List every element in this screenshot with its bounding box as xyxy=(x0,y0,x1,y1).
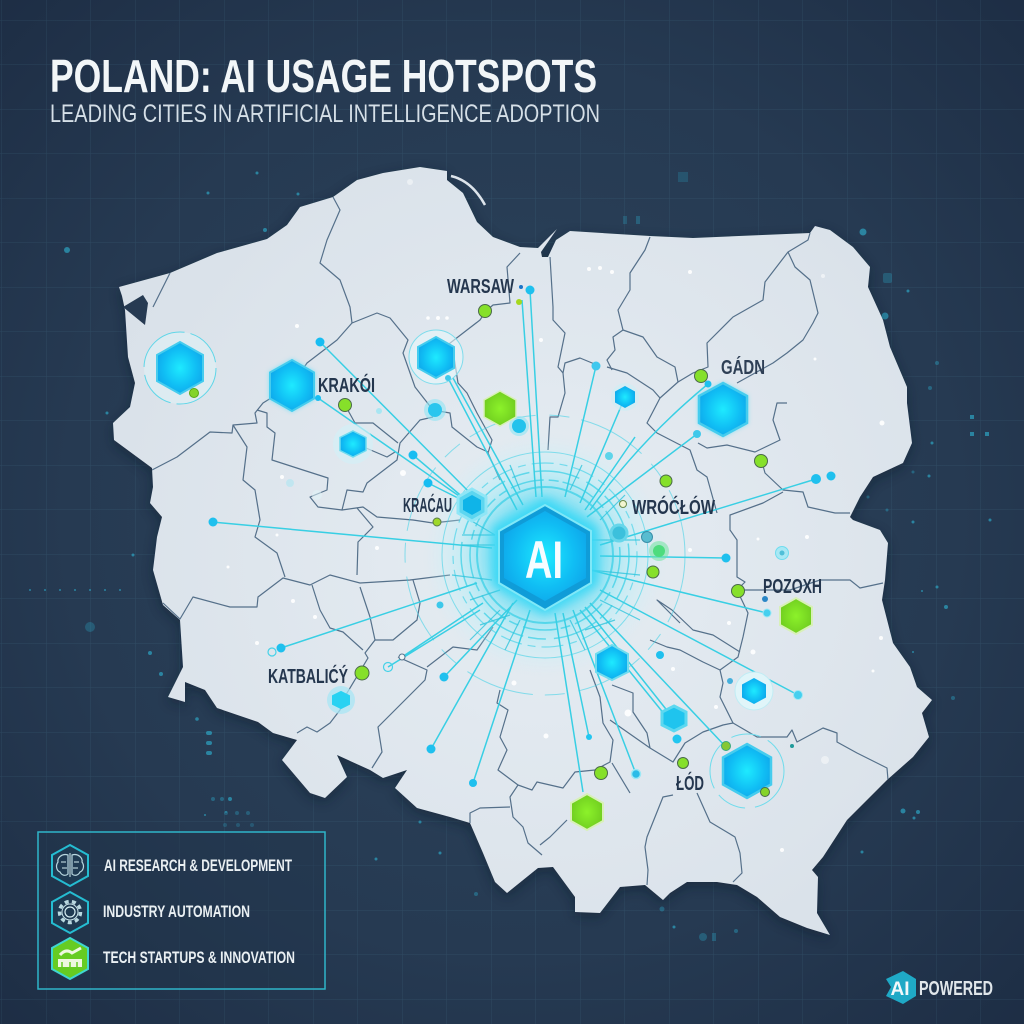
label: Warsaw: WARSAW xyxy=(447,276,514,298)
label: Katbalicy xyxy=(268,664,369,714)
legend item: industry automation xyxy=(52,892,250,933)
map of Poland xyxy=(113,167,932,939)
city node: western hotspot xyxy=(144,332,216,404)
green startup node: upper centre xyxy=(484,391,516,426)
outer end-point nodes xyxy=(208,518,477,787)
label: Wrocław xyxy=(611,495,788,578)
lagoon notch west xyxy=(123,295,148,325)
hex nodes: lower-right cluster xyxy=(586,645,802,780)
city node: lower-right hotspot xyxy=(710,734,794,808)
legend item: industry automation: INDUSTRY AUTOMATION xyxy=(103,903,250,921)
central AI hexagon xyxy=(492,497,598,615)
label: Kracau: KRAĆAU xyxy=(403,493,452,517)
legend item: tech startups: TECH STARTUPS & INNOVATION xyxy=(103,949,295,967)
label: Warsaw xyxy=(447,276,534,318)
hex nodes: upper-centre cluster xyxy=(333,330,701,488)
legend item: tech startups xyxy=(52,938,295,979)
network lines from the central AI hub xyxy=(212,290,816,792)
badge: AI powered: AI xyxy=(890,979,910,1000)
label: Łódź: ŁÓD xyxy=(676,771,704,795)
legend item: AI research xyxy=(52,845,292,886)
label: Krakói: KRAKÓI xyxy=(318,373,375,397)
badge: AI powered: POWERED xyxy=(919,978,993,1000)
legend item: AI research: AI RESEARCH & DEVELOPMENT xyxy=(104,857,292,875)
subtitle: LEADING CITIES IN ARTIFICIAL INTELLIGENCE ADOPTION xyxy=(50,100,600,128)
city node: Krakói hotspot xyxy=(269,338,382,414)
label: Pozoxh xyxy=(732,576,822,634)
label: Pozoxh: POZOXH xyxy=(763,576,822,598)
city node: Gádn hotspot xyxy=(592,356,836,487)
sparkles xyxy=(226,179,884,852)
central AI hexagon: AI xyxy=(525,531,563,590)
city node: Gádn hotspot: GÁDN xyxy=(721,356,765,379)
badge: AI powered xyxy=(886,971,993,1004)
label: Kracau xyxy=(403,489,486,526)
green startup node: south xyxy=(571,794,603,830)
label: Katbalicy: KATBALIĆÝ xyxy=(268,664,348,688)
legend xyxy=(38,832,325,989)
label: Wrocław: WRÓĆŁÓW xyxy=(632,495,715,519)
title: POLAND: AI USAGE HOTSPOTS xyxy=(50,50,597,102)
